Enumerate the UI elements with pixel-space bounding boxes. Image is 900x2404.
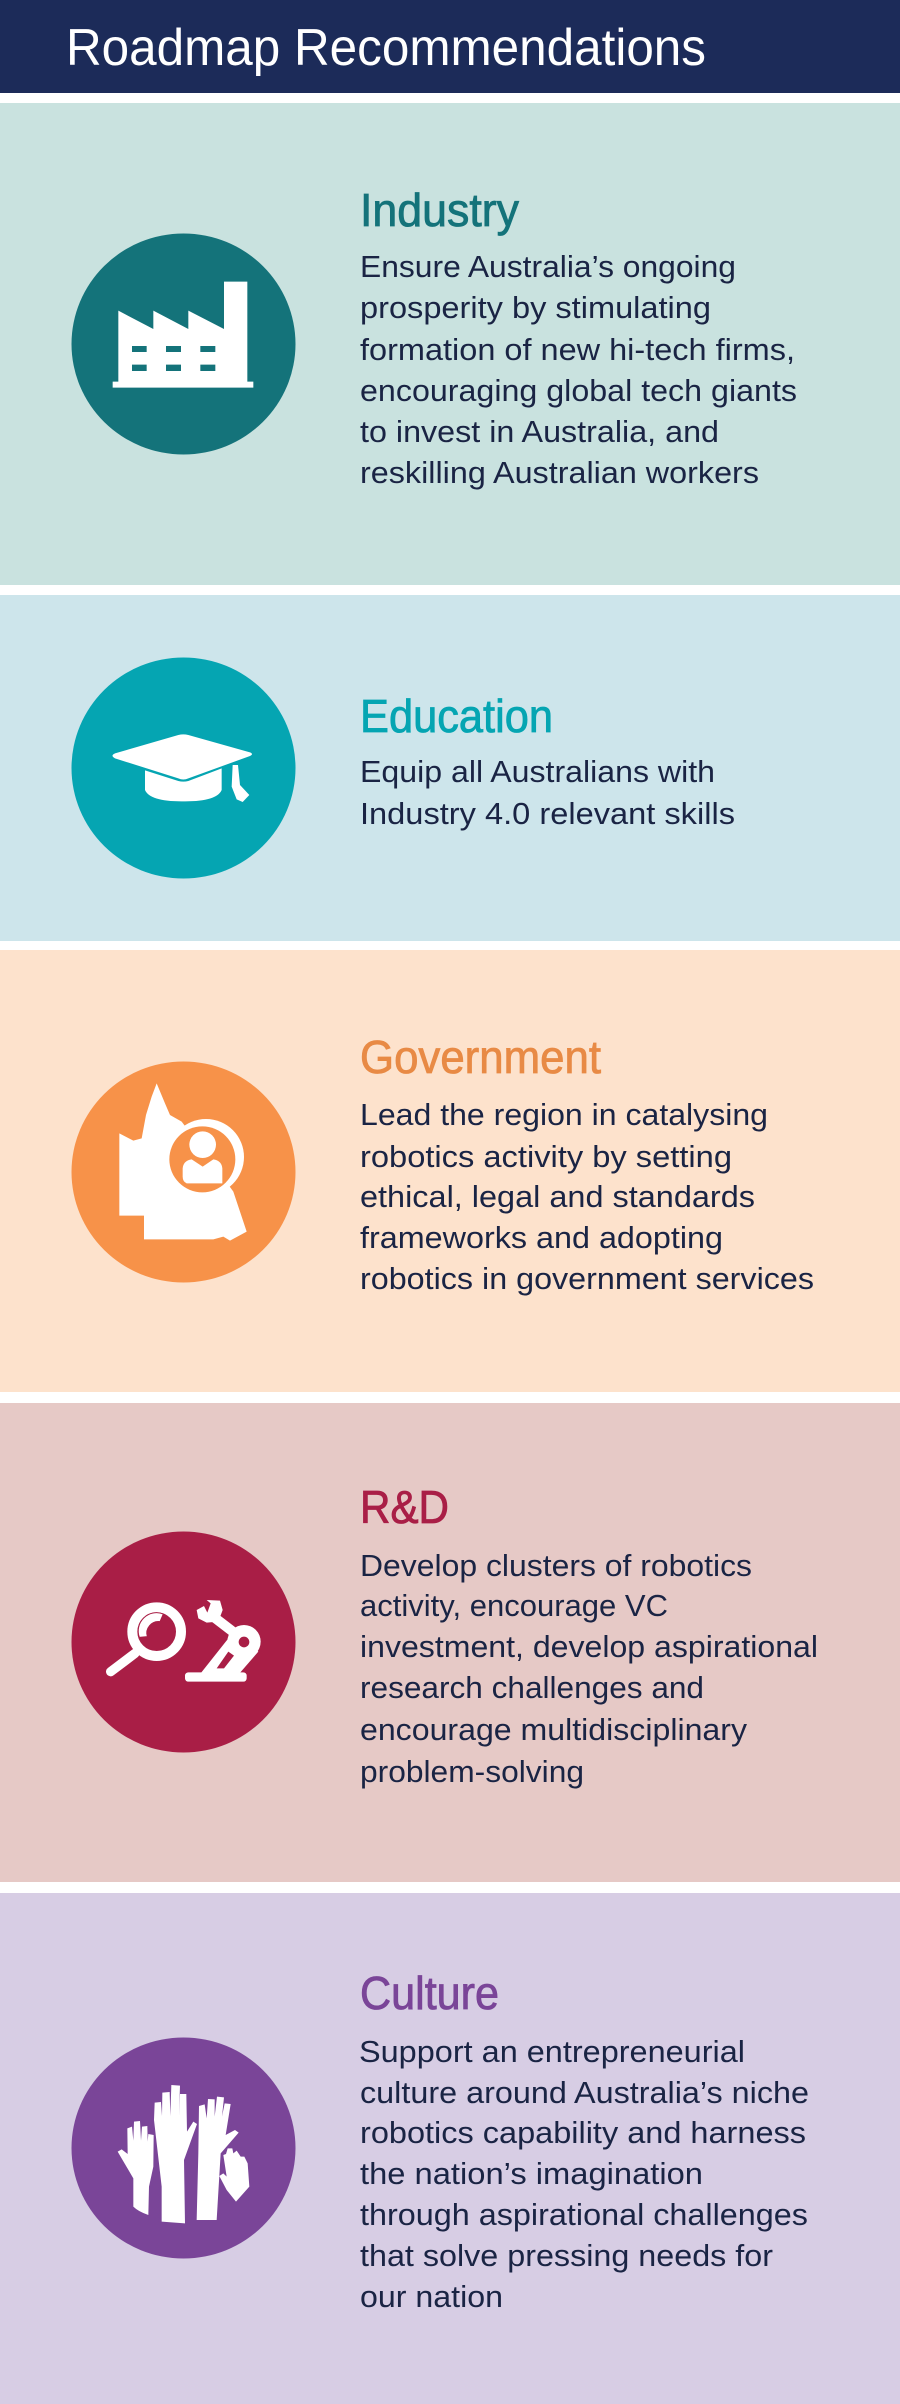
heading: culture: Culture <box>360 1967 499 2019</box>
panel: R&D <box>0 1403 900 1882</box>
text: culture description <box>359 2034 809 2314</box>
panel: industry <box>0 103 900 585</box>
text: R&D description: encourage multidisciplinary <box>360 1712 748 1747</box>
text: industry description: prosperity by stimulating <box>360 290 711 325</box>
text: government description: ethical, legal and standards <box>360 1179 755 1214</box>
text: education description <box>360 754 735 831</box>
text: culture description: Support an entrepreneurial <box>359 2034 745 2069</box>
header banner <box>0 0 900 93</box>
text: government description: frameworks and adopting <box>360 1220 723 1255</box>
text: industry description <box>360 249 797 490</box>
icon: queensland map with person <box>72 1062 296 1282</box>
text: R&D description: investment, develop aspirational <box>360 1629 818 1664</box>
text: education description: Industry 4.0 relevant skills <box>360 796 735 831</box>
heading: R&D: R&D <box>360 1481 449 1533</box>
icon: factory <box>72 234 296 454</box>
title: Roadmap Recommendations <box>66 19 706 77</box>
text: industry description: encouraging global tech giants <box>360 373 797 408</box>
text: R&D description: Develop clusters of robotics <box>360 1548 752 1583</box>
heading: education: Education <box>360 690 553 742</box>
icon: raised hands <box>72 2038 296 2258</box>
text: culture description: through aspirational challenges <box>360 2197 808 2232</box>
text: R&D description: activity, encourage VC <box>360 1588 668 1623</box>
text: industry description: reskilling Australian workers <box>360 455 759 490</box>
icon: magnifier and robot arm <box>72 1532 296 1752</box>
panel: government <box>0 950 900 1392</box>
text: government description: robotics activity by setting <box>360 1139 732 1174</box>
icon: graduation cap <box>72 658 296 878</box>
text: culture description: that solve pressing needs for <box>360 2238 773 2273</box>
text: industry description: formation of new hi-tech firms, <box>360 332 795 367</box>
text: industry description: to invest in Australia, and <box>360 414 719 449</box>
text: government description: Lead the region in catalysing <box>360 1097 768 1132</box>
text: government description: robotics in government services <box>360 1261 814 1296</box>
heading: government: Government <box>360 1031 601 1083</box>
text: government description <box>360 1097 814 1296</box>
text: culture description: the nation’s imagination <box>360 2156 703 2191</box>
text: culture description: culture around Australia’s niche <box>360 2075 809 2110</box>
text: R&D description: research challenges and <box>360 1670 704 1705</box>
text: culture description: our nation <box>360 2279 503 2314</box>
text: industry description: Ensure Australia’s ongoing <box>360 249 736 284</box>
panel: culture <box>0 1893 900 2404</box>
heading: industry: Industry <box>360 184 519 236</box>
panel: education <box>0 595 900 941</box>
text: education description: Equip all Australians with <box>360 754 715 789</box>
text: R&D description: problem-solving <box>360 1754 584 1789</box>
text: culture description: robotics capability and harness <box>360 2115 806 2150</box>
text: R&D description <box>360 1548 818 1789</box>
